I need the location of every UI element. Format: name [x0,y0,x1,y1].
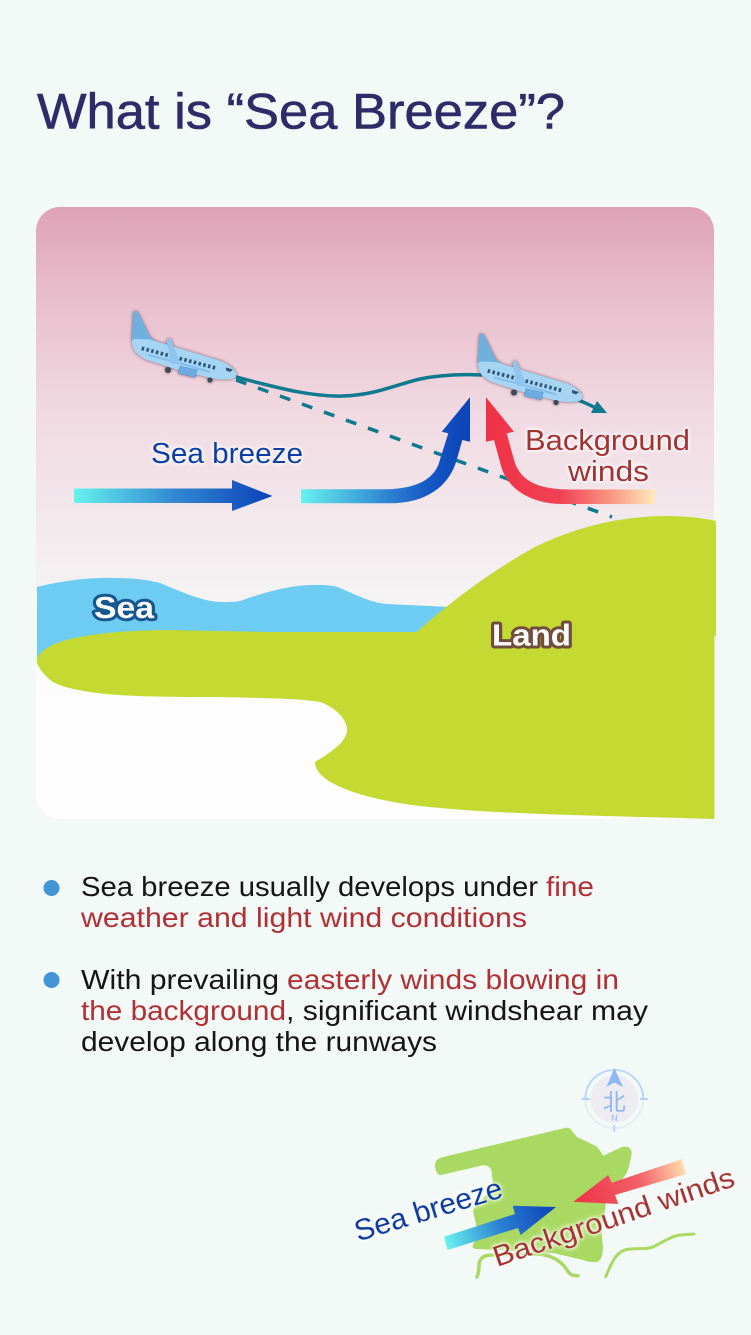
label: background winds: Background [525,425,690,457]
airplane descending [132,311,236,383]
map: Hong Kong airport area [350,1128,739,1277]
bullet dot one [44,880,60,896]
bullet text one: weather and light wind conditions [80,902,527,933]
bullet text two: easterly winds blowing in [287,964,619,995]
land [36,516,716,819]
bullet text two: With prevailing [81,964,279,995]
sea breeze arrow left [74,480,272,511]
map coastline left [477,1254,578,1277]
label: sea breeze: Sea breeze [151,438,303,470]
bullet text one: Sea breeze usually develops under [81,871,538,902]
background winds arrow rising [486,397,655,504]
map coastline right [606,1234,694,1277]
map background winds arrow [573,1159,686,1204]
map sea breeze arrow [444,1206,556,1250]
bullet dot two [44,972,60,988]
map label: sea breeze: Sea breeze [350,1172,506,1248]
flight path actual [236,375,482,396]
icon: north compass: 北 [603,1089,626,1115]
panel: sea breeze diagram [36,207,716,819]
bullet text one [80,871,594,933]
descending flight path dashed [236,380,612,517]
bullet text one: fine [546,871,594,902]
bullet text two [81,964,648,1057]
bullet text two: develop along the runways [81,1026,437,1057]
bullet text two: , significant windshear may [286,995,648,1026]
label: land: Land [492,618,571,652]
icon: north compass [582,1068,648,1132]
sea breeze arrow rising [301,397,470,503]
label: background winds: winds [567,456,649,488]
bullet two [44,964,648,1057]
panel background sky [36,207,714,819]
bullet text two: the background [81,995,286,1026]
flight path arrow [578,400,607,413]
sea [37,578,450,660]
map island [435,1128,632,1262]
label: background winds [525,425,690,488]
icon: north compass: N [611,1113,618,1123]
map label: background winds: Background winds [489,1162,739,1274]
label: sea: Sea [94,590,155,625]
airplane on flight path [478,334,582,405]
title: What is “Sea Breeze”? [37,84,565,140]
bullet one [44,871,594,933]
